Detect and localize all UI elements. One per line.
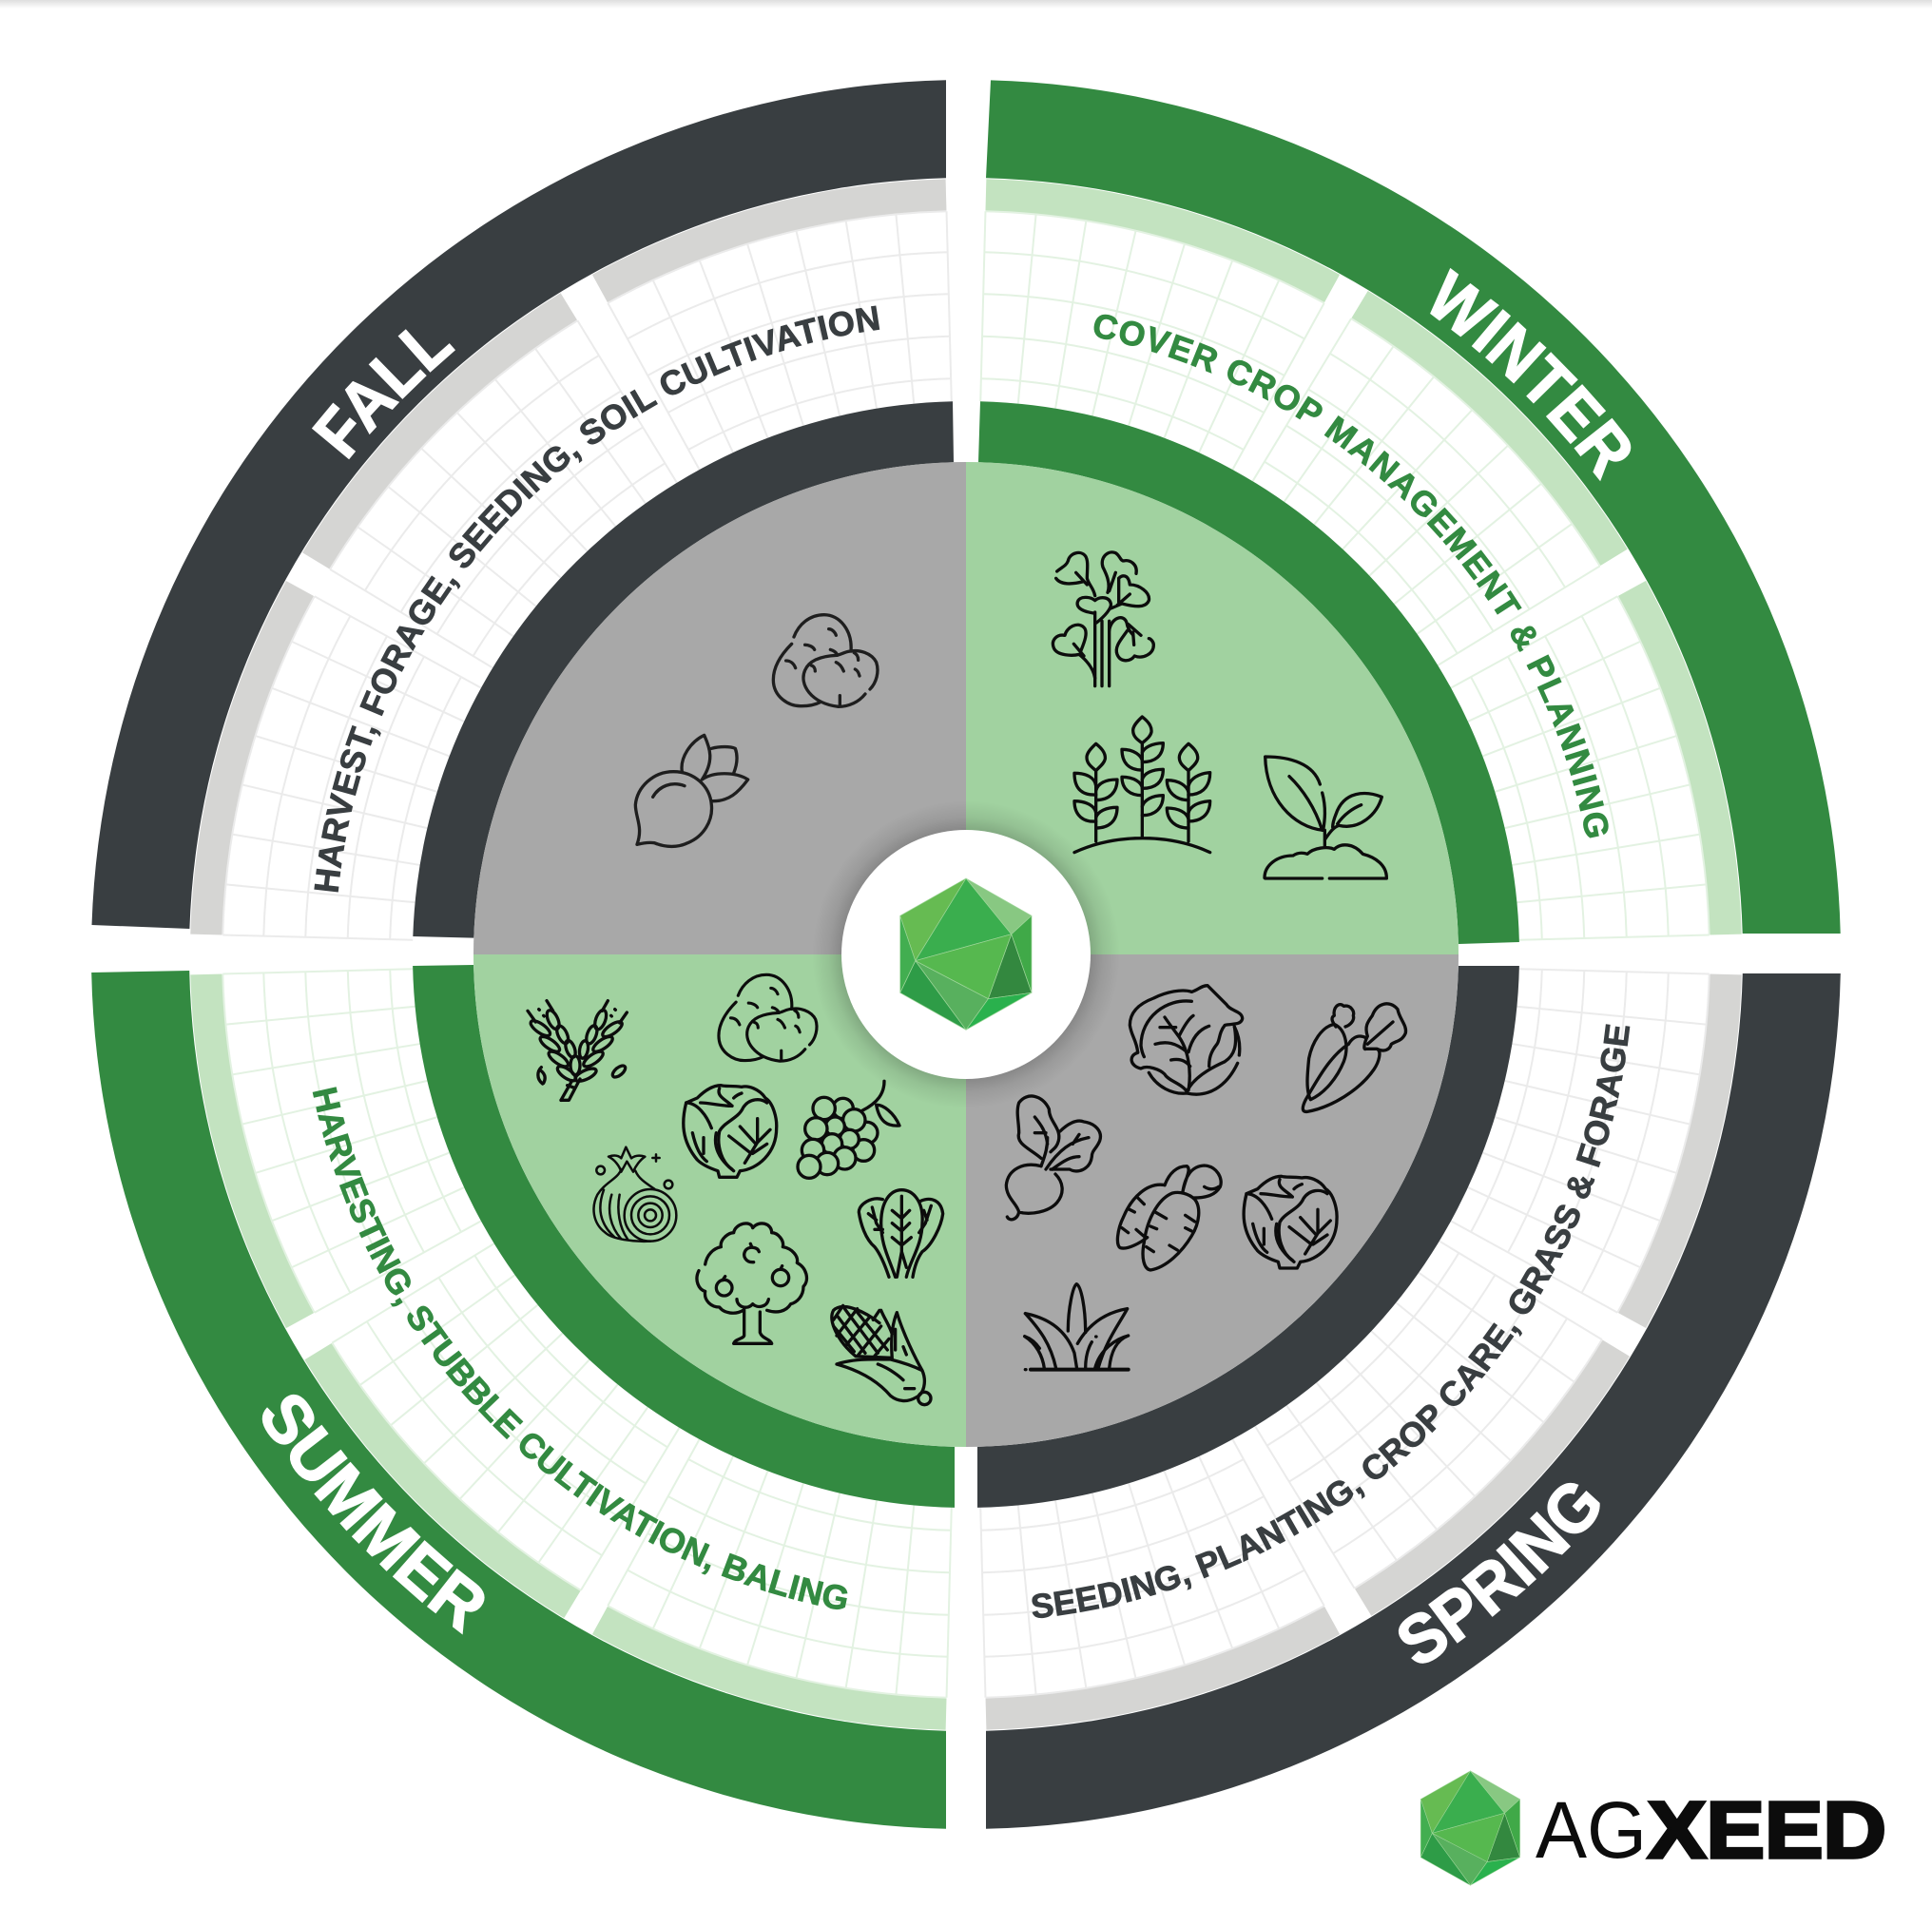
winter grid	[979, 211, 1782, 1016]
summer heading: SUMMER	[262, 1394, 485, 1635]
panel: spring quadrant	[977, 966, 1841, 1829]
icons: summer crops	[528, 974, 943, 1405]
panel: summer quadrant	[91, 965, 955, 1829]
icons: winter crops	[1053, 552, 1386, 878]
icon: carrots pair	[1303, 1004, 1406, 1111]
icon: sweet carrots	[1117, 1165, 1221, 1270]
top edge shading	[0, 0, 1932, 9]
icon: cabbage head	[1130, 986, 1243, 1094]
fall light ring segments	[206, 121, 946, 936]
summer activities: HARVESTING, STUBBLE CULTIVATION, BALING	[312, 1087, 848, 1610]
winter inner band	[978, 401, 1519, 944]
spring activities: SEEDING, PLANTING, CROP CARE, GRASS & FORAGE	[1032, 1024, 1630, 1618]
icon: spinach	[859, 1190, 943, 1277]
summer outer band	[91, 971, 946, 1829]
panel: winter quadrant	[978, 80, 1841, 944]
spring outer band	[986, 973, 1841, 1829]
spring grid	[904, 968, 1710, 1770]
fall grid	[222, 139, 1028, 941]
hub soft shadow	[812, 800, 1120, 1108]
fall inner band	[413, 401, 954, 938]
logo wordmark: AG	[1536, 1785, 1647, 1875]
icon: cabbage	[684, 1086, 777, 1177]
icon: central logo gem	[900, 878, 1032, 1030]
icon: cabbage	[1244, 1176, 1337, 1268]
logo wordmark	[1536, 1785, 1886, 1875]
central disc quadrants	[473, 462, 1459, 1447]
summer inner band	[413, 965, 955, 1508]
summer grid	[150, 893, 953, 1698]
hub circle	[841, 830, 1091, 1079]
winter activities: COVER CROP MANAGEMENT & PLANNING	[1093, 314, 1609, 838]
icon: apple tree	[697, 1223, 806, 1343]
spring inner band	[977, 966, 1519, 1508]
icon: beet	[1006, 1096, 1100, 1220]
icon: clover	[1053, 552, 1153, 686]
icon: wheat	[528, 1001, 628, 1100]
icons: fall crops	[635, 615, 878, 846]
logo gem	[1420, 1771, 1520, 1885]
winter heading: WINTER	[1430, 268, 1632, 481]
icon: grass	[1025, 1284, 1129, 1370]
icons: spring crops	[1006, 986, 1406, 1370]
summer light ring segments	[132, 974, 948, 1714]
icon: onion	[594, 1147, 676, 1242]
icon: seedling	[1265, 757, 1386, 878]
fall outer band	[91, 80, 946, 929]
icon: potatoes	[719, 974, 817, 1061]
logo wordmark: XEED	[1648, 1785, 1886, 1875]
panel: fall quadrant	[91, 80, 954, 941]
icon: turnip	[635, 735, 748, 846]
fall activities: HARVEST, FORAGE, SEEDING, SOIL CULTIVATION	[314, 306, 880, 892]
spring heading: SPRING	[1398, 1483, 1600, 1664]
icon: potatoes	[773, 615, 878, 706]
icon: corn	[832, 1305, 931, 1405]
winter light ring segments	[984, 195, 1800, 934]
icon: three plants	[1074, 717, 1210, 853]
logo: AgXeed	[1420, 1771, 1886, 1885]
fall heading: FALL	[312, 329, 455, 460]
winter outer band	[986, 80, 1841, 934]
icon: grapes	[798, 1081, 899, 1178]
spring light ring segments	[986, 973, 1726, 1788]
